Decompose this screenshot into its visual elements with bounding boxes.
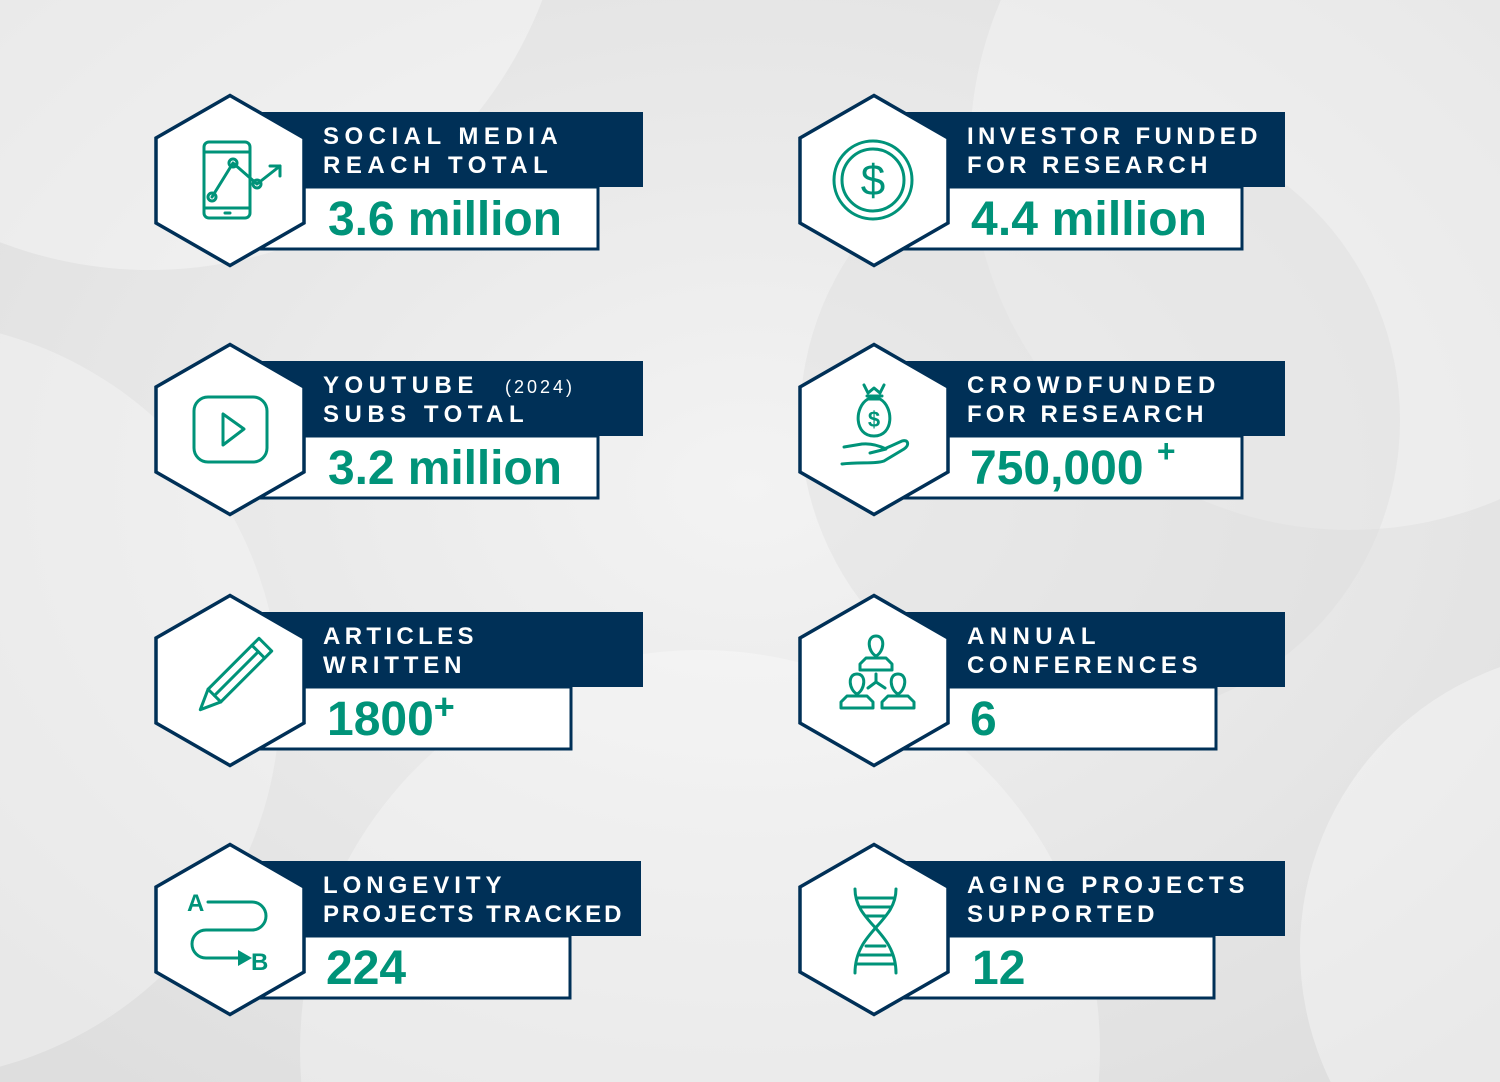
value box: 6 [970, 693, 997, 746]
title bar: CROWDFUNDED [967, 372, 1221, 399]
card: longevity projects tracked [156, 844, 641, 1014]
card: annual conferences [800, 596, 1285, 766]
title bar: REACH TOTAL [323, 152, 553, 179]
value box: 12 [972, 942, 1025, 995]
title bar [262, 861, 641, 936]
title bar: LONGEVITY [323, 872, 507, 899]
title bar [906, 112, 1285, 187]
card: aging projects supported [800, 844, 1285, 1014]
value box [260, 436, 598, 498]
title bar: CONFERENCES [967, 652, 1203, 679]
icon hexagon: A to B path [156, 844, 304, 1014]
title bar [262, 361, 643, 436]
value box: 1800 [327, 693, 434, 746]
icon hexagon: DNA [800, 844, 948, 1014]
card: social media reach [156, 96, 643, 266]
icon hexagon: A to B path: B [251, 949, 268, 976]
title bar: SUBS TOTAL [323, 401, 529, 428]
title bar: FOR RESEARCH [967, 401, 1209, 428]
title bar: PROJECTS TRACKED [323, 901, 627, 928]
icon hexagon: money bag in hand [800, 344, 948, 514]
value box: 3.2 million [328, 442, 562, 495]
title bar: WRITTEN [323, 652, 467, 679]
value box: 3.6 million [328, 193, 562, 246]
icon hexagon: dollar coin [800, 96, 948, 266]
title bar [262, 112, 643, 187]
title bar: ARTICLES [323, 623, 479, 650]
card: crowdfunded [800, 344, 1285, 514]
value box: 224 [326, 942, 406, 995]
title bar: AGING PROJECTS [967, 872, 1250, 899]
value box [260, 936, 570, 998]
icon hexagon: phone chart [156, 96, 304, 266]
value box [260, 686, 571, 749]
icon hexagon: money bag in hand: $ [868, 407, 880, 432]
icon hexagon: A to B path: A [187, 890, 204, 917]
title bar: INVESTOR FUNDED [967, 123, 1263, 150]
value box [904, 187, 1242, 249]
icon hexagon: people network [800, 596, 948, 766]
icon hexagon: pencil [156, 596, 304, 766]
value box: + [434, 686, 455, 727]
card: youtube subs [156, 344, 643, 514]
value box [904, 433, 1242, 498]
icon hexagon: dollar coin: $ [861, 156, 885, 205]
title bar: FOR RESEARCH [967, 152, 1213, 179]
value box [260, 187, 598, 249]
title bar: YOUTUBE (2024) [323, 372, 575, 399]
value box: + [1157, 433, 1176, 469]
value box [904, 687, 1216, 749]
card: articles written [156, 596, 643, 766]
title bar [262, 612, 643, 687]
title bar [906, 361, 1285, 436]
title bar [906, 612, 1285, 687]
title bar: ANNUAL [967, 623, 1101, 650]
card: investor funded [800, 96, 1285, 266]
value box [904, 936, 1214, 998]
title bar: SUPPORTED [967, 901, 1160, 928]
title bar [906, 861, 1285, 936]
value box: 4.4 million [971, 193, 1207, 246]
icon hexagon: play button [156, 344, 304, 514]
title bar: SOCIAL MEDIA [323, 123, 563, 150]
value box: 750,000 [970, 442, 1144, 495]
